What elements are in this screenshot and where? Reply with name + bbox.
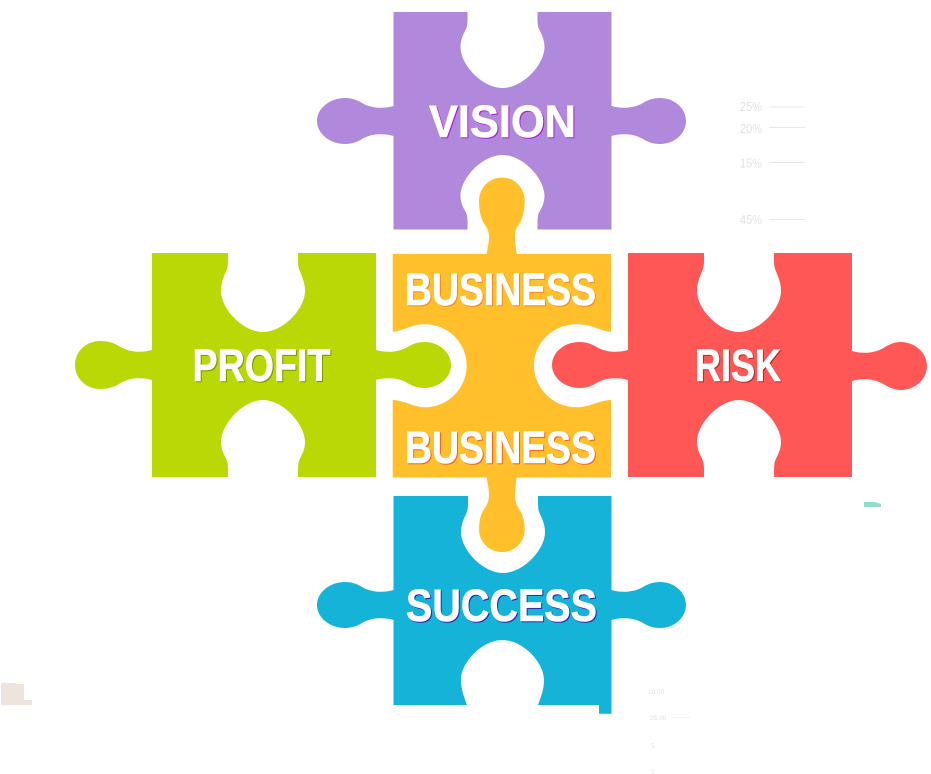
puzzle piece: vision: [317, 12, 686, 230]
teal fragment: [864, 502, 881, 507]
label: business bottom: BUSINESS: [405, 422, 596, 473]
label: profit: PROFIT: [192, 340, 330, 391]
faint percentage labels: 45%: [740, 212, 762, 227]
faint percentage labels: [740, 99, 805, 227]
label: vision: VISION: [429, 96, 576, 147]
faint lower labels: [648, 689, 690, 774]
faint percentage labels: 15%: [740, 156, 762, 170]
faint lower labels: 25.00: [650, 715, 667, 722]
beige fragment: [1, 683, 32, 705]
puzzle piece: success: [317, 496, 686, 714]
puzzle piece: profit: [75, 253, 451, 477]
label: success: SUCCESS: [406, 580, 597, 631]
puzzle piece: business: [393, 178, 611, 552]
faint lower labels: 5: [651, 743, 655, 750]
faint percentage labels: 25%: [740, 99, 762, 114]
label: business top: BUSINESS: [405, 264, 596, 315]
label: risk: RISK: [695, 340, 781, 391]
faint percentage labels: 20%: [740, 121, 762, 136]
faint lower labels: 10.00: [648, 689, 665, 696]
puzzle piece: risk: [552, 253, 927, 477]
